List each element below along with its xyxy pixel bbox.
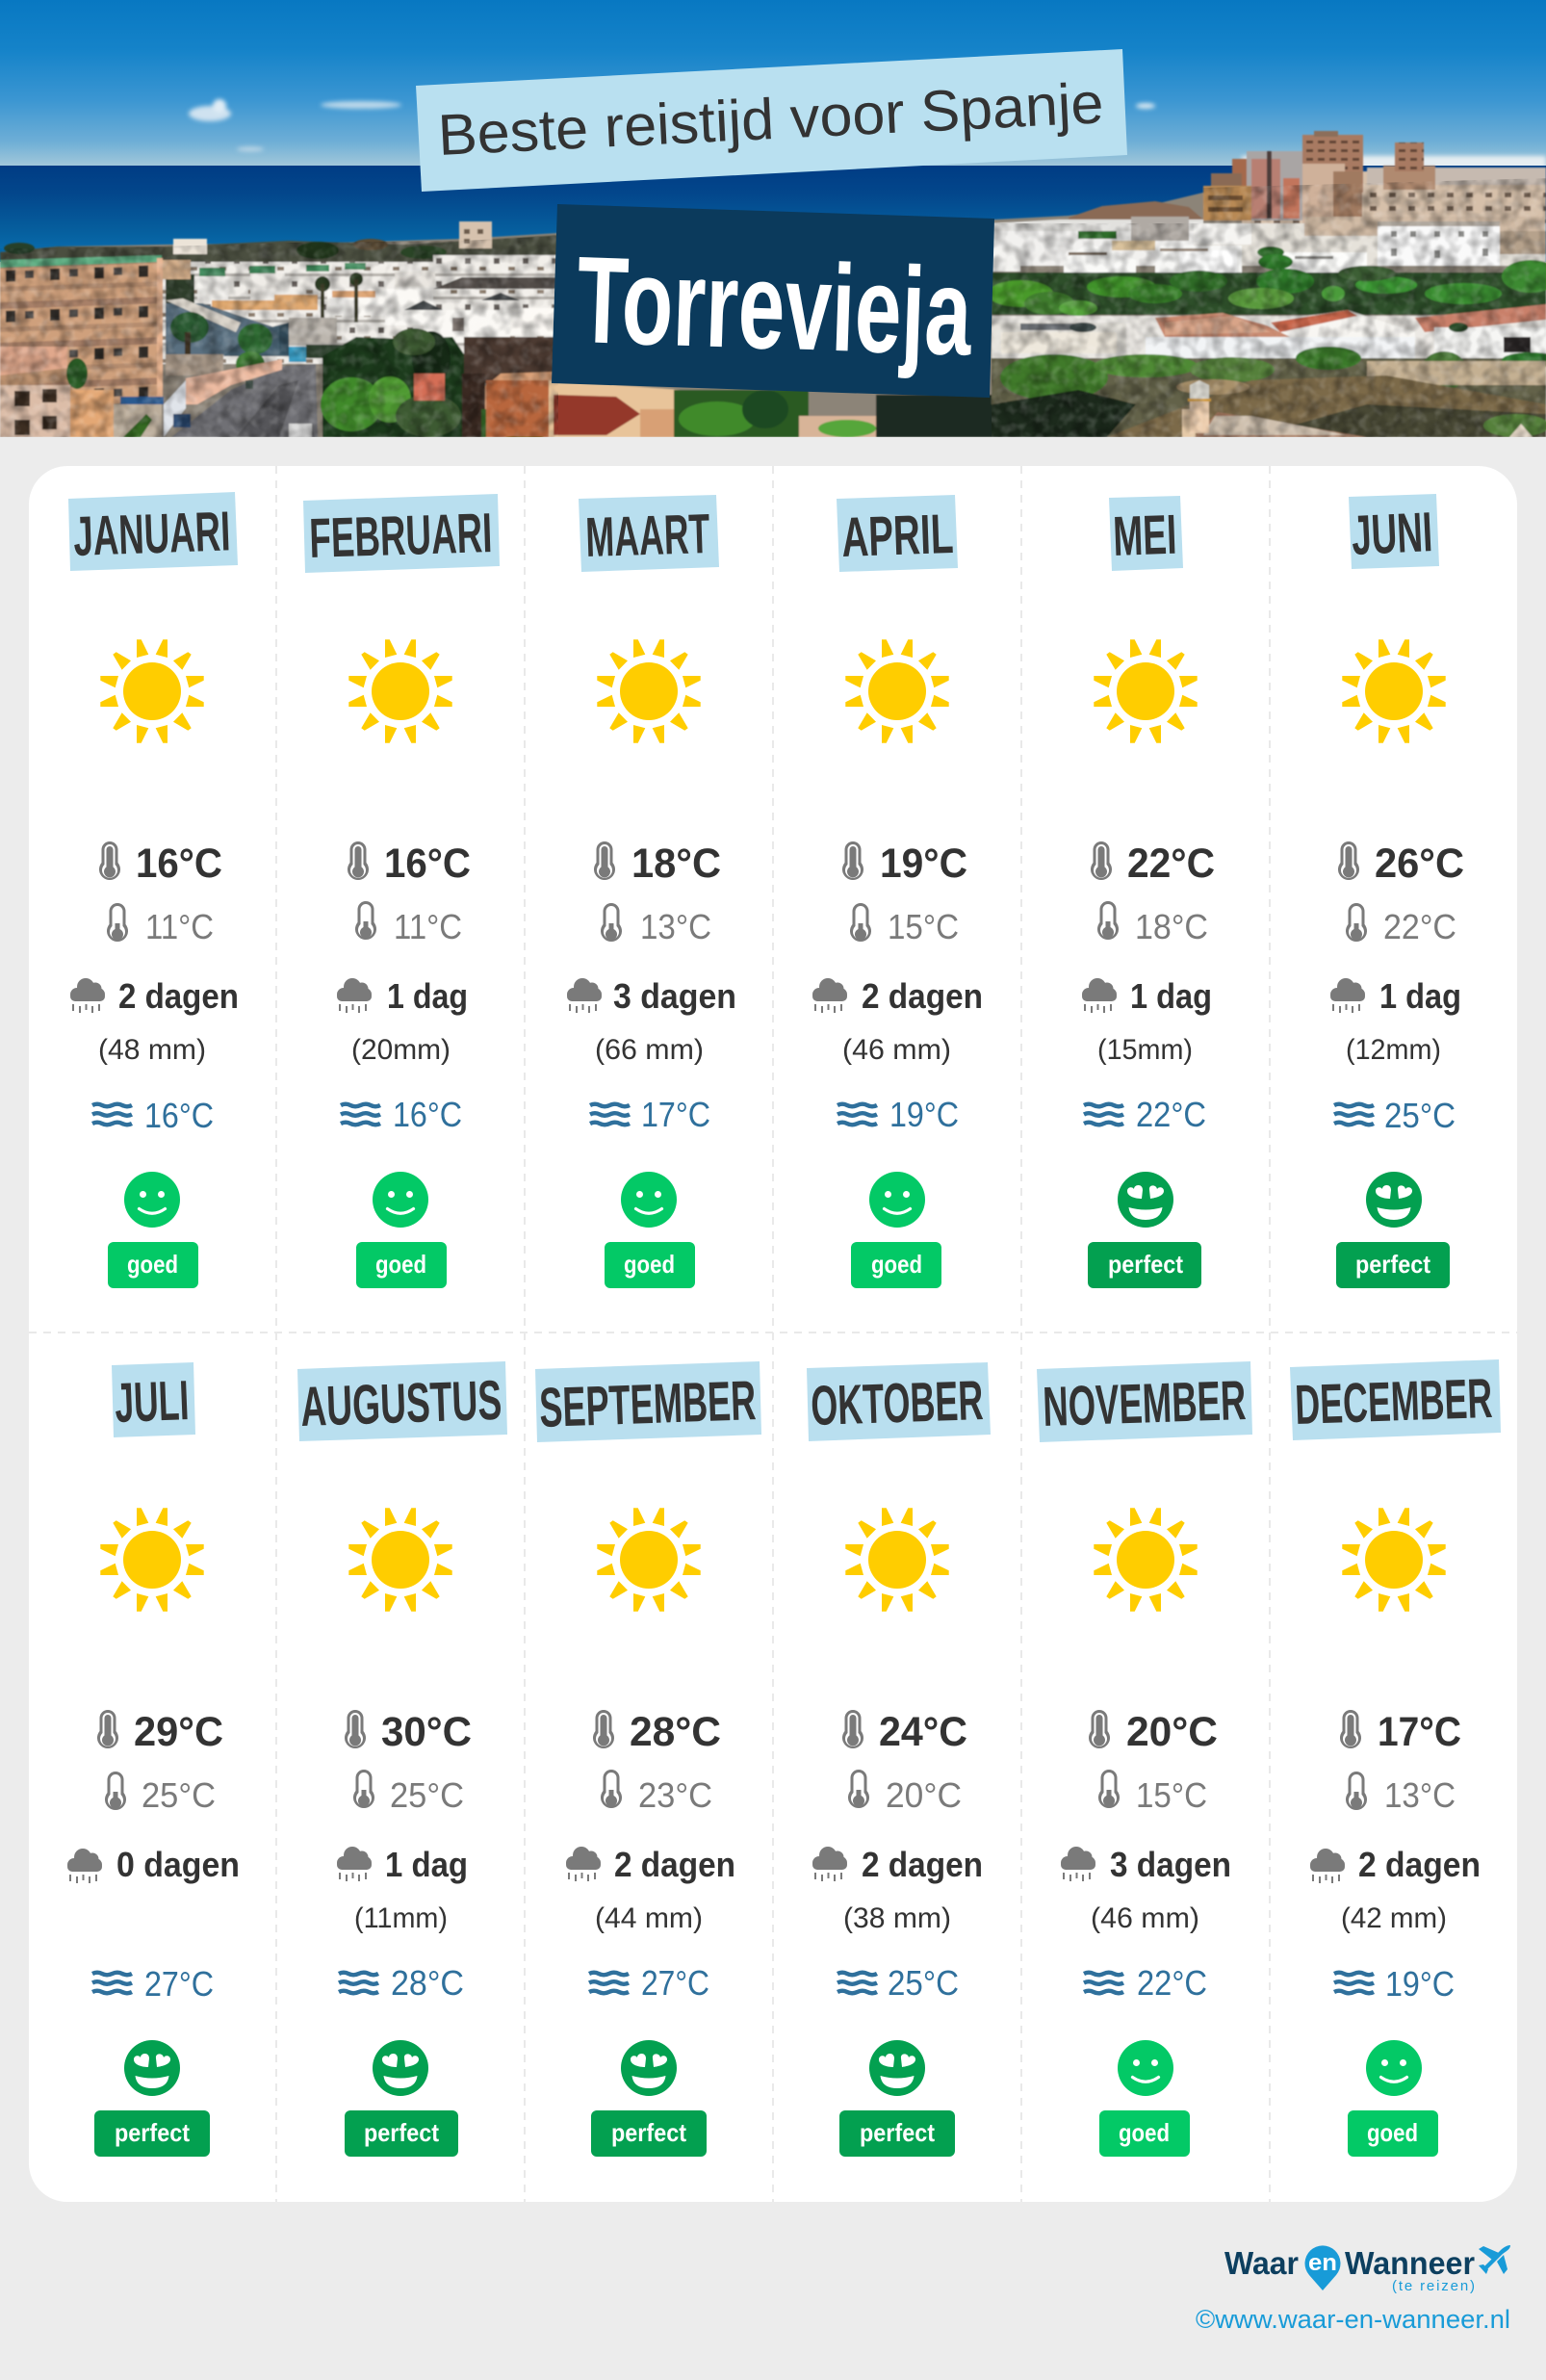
panel: weather calendar card [29,466,1517,2202]
rating badge: goed [375,1250,426,1279]
high temperature [1340,1709,1461,1755]
title banner: Torrevieja: Torrevieja [575,231,974,382]
website credit: ©www.waar-en-wanneer.nl [1196,2305,1510,2334]
rating badge: goed [1119,2118,1170,2147]
icon: smiley [124,2040,180,2096]
icon: smiley [1366,2040,1422,2096]
rain days [1061,1845,1231,1884]
water temperature [589,1963,709,2003]
rain days [566,1845,735,1884]
rating badge: perfect [1355,1250,1430,1279]
low temperature [1097,901,1208,946]
heading [807,1362,991,1441]
icon: smiley [373,2040,428,2096]
heading: SEPTEMBER [538,1369,757,1439]
rating badge: perfect [860,2118,935,2147]
low temperature: 11°C [394,907,462,946]
icon: sun [100,1508,204,1612]
rainfall: (42 mm) [1341,1902,1447,1934]
rating badge [1099,2110,1190,2157]
rating badge [591,2110,707,2157]
low temperature [601,903,711,946]
low temperature: 25°C [142,1775,216,1815]
month: oktober [807,1362,991,2157]
low temperature [1098,1770,1207,1815]
rain days: 0 dagen [116,1845,240,1884]
rating badge [108,1242,198,1288]
low temperature [107,903,214,946]
logo tagline: (te reizen) [1392,2278,1475,2294]
high temperature [1338,841,1464,887]
water temperature [1334,1964,1455,2004]
low temperature: 13°C [1384,1775,1456,1815]
water temperature: 25°C [1384,1096,1456,1135]
logo: Waar en Wanneer: Wanneer [1345,2245,1475,2281]
high temperature: 16°C [136,841,222,887]
icon: sun [597,639,701,743]
month: december [1290,1359,1501,2157]
icon: smiley [124,1172,180,1228]
low temperature: 13°C [640,907,711,946]
water temperature: 16°C [144,1096,214,1135]
heading: FEBRUARI [308,502,493,570]
low temperature: 11°C [145,907,214,946]
icon: smiley [869,1172,925,1228]
rain days: 3 dagen [1110,1845,1231,1884]
water temperature [341,1095,462,1134]
high temperature: 20°C [1126,1709,1218,1755]
rain days [1082,976,1212,1016]
rating badge: perfect [115,2118,190,2147]
logo: Waar en Wanneer: Waar [1224,2245,1299,2281]
rating badge [605,1242,695,1288]
rating badge: goed [127,1250,178,1279]
left white cluster [431,254,556,263]
rating badge [1336,1242,1450,1288]
icon: sun [845,1508,949,1612]
rainfall: (11mm) [354,1902,448,1934]
high temperature [594,841,721,887]
month: mei [1082,496,1215,1288]
high temperature [842,841,967,887]
low temperature: 22°C [1383,907,1456,946]
white band right [1194,221,1546,268]
subtitle banner: Beste reistijd voor Spanje: Beste reistijd voor Spanje [436,70,1105,168]
rating badge: perfect [611,2118,686,2147]
rain days [567,976,736,1016]
rain days [67,1845,240,1884]
heading [579,495,719,572]
rain days [1310,1845,1481,1884]
heading [297,1361,507,1441]
heading: NOVEMBER [1042,1369,1247,1438]
heading [837,495,958,572]
rain days [812,1845,983,1884]
rating badge [1088,1242,1201,1288]
heading: MAART [584,503,710,569]
rating badge [94,2110,210,2157]
high temperature: 18°C [631,841,721,887]
heading: OKTOBER [810,1369,984,1437]
rain days: 2 dagen [862,976,983,1016]
white houses right [992,316,1546,358]
heading: JANUARI [72,500,231,568]
rain days [337,976,468,1016]
rating badge: goed [1367,2118,1418,2147]
low temperature: 20°C [886,1775,962,1815]
rainfall: (48 mm) [98,1034,206,1066]
low temperature [601,1770,712,1815]
rating badge: goed [624,1250,675,1279]
rain days: 2 dagen [862,1845,983,1884]
water temperature [1334,1096,1456,1135]
high temperature: 29°C [134,1709,223,1755]
icon: smiley [1118,2040,1173,2096]
heading [303,494,500,573]
low temperature [848,1770,962,1815]
rain days [337,1845,468,1884]
heading: JUNI [1351,501,1434,567]
month: januari [68,492,239,1288]
heading [1349,494,1439,569]
icon: sun [348,639,452,743]
rain days: 1 dag [1130,976,1212,1016]
water temperature [339,1963,464,2003]
icon: sun [1094,639,1198,743]
water temperature: 19°C [1385,1964,1455,2004]
water temperature: 22°C [1136,1095,1206,1134]
high temperature [842,1709,967,1755]
month: juni [1330,494,1464,1288]
icon: smiley [621,2040,677,2096]
rainfall: (38 mm) [843,1902,951,1934]
water temperature [837,1095,959,1134]
water temperature [92,1964,214,2004]
trees centre-left [322,337,472,437]
water temperature: 27°C [641,1963,709,2003]
water temperature [1084,1963,1207,2003]
water temperature [92,1096,214,1135]
icon: sun [1094,1508,1198,1612]
rating badge: perfect [1108,1250,1183,1279]
icon: airplane [1479,2245,1510,2274]
water temperature [837,1963,959,2003]
water temperature: 16°C [393,1095,462,1134]
heading [535,1361,761,1442]
hotel [0,258,162,406]
water temperature: 22°C [1137,1963,1207,2003]
rain days: 2 dagen [1358,1845,1481,1884]
water temperature: 19°C [889,1095,959,1134]
right background [1241,170,1546,223]
heading [112,1362,195,1437]
month: maart [567,495,736,1288]
low temperature [850,903,959,946]
low temperature: 23°C [638,1775,712,1815]
icon: smiley [1118,1172,1173,1228]
water temperature: 28°C [391,1963,464,2003]
month: september [535,1361,761,2157]
icon: smiley [373,1172,428,1228]
subtitle banner: Beste reistijd voor Spanje [416,49,1127,192]
month: november [1037,1361,1252,2157]
high temperature: 22°C [1127,841,1215,887]
low temperature [105,1772,216,1815]
road [171,364,318,437]
heading: AUGUSTUS [299,1369,502,1438]
heading: APRIL [840,503,954,569]
icon: sun [348,1508,452,1612]
month: februari [303,494,500,1288]
water temperature: 27°C [144,1964,214,2004]
rainfall: (66 mm) [595,1034,704,1066]
rain days: 1 dag [385,1845,468,1884]
rainfall: (20mm) [351,1034,451,1066]
rainfall: (12mm) [1346,1034,1441,1066]
rainfall: (46 mm) [842,1034,951,1066]
icon: smiley [869,2040,925,2096]
rating badge [356,1242,447,1288]
rain days [812,976,983,1016]
houses bottom [464,337,558,383]
high temperature [1091,841,1215,887]
rain days [70,976,239,1016]
rain days: 2 dagen [118,976,239,1016]
rain days: 3 dagen [613,976,736,1016]
hillside [992,358,1546,437]
left village [162,260,554,365]
icon: sun [1342,639,1446,743]
high temperature: 24°C [879,1709,967,1755]
heading: JULI [114,1369,190,1435]
low temperature [353,1770,464,1815]
towers [1302,135,1363,193]
low temperature: 15°C [1136,1775,1207,1815]
rainfall: (44 mm) [595,1902,703,1934]
low temperature: 18°C [1135,907,1208,946]
below dark title [486,380,554,437]
water temperature: 25°C [888,1963,959,2003]
rating badge [345,2110,458,2157]
heading [68,492,238,571]
green band right [992,272,1546,315]
high temperature: 30°C [381,1709,472,1755]
high temperature: 17°C [1378,1709,1461,1755]
icon: sun [100,639,204,743]
water temperature [1084,1095,1206,1134]
high temperature: 19°C [880,841,967,887]
water temperature [590,1095,710,1134]
low temperature [1346,903,1456,946]
high temperature [348,841,471,887]
rainfall: (46 mm) [1091,1902,1199,1934]
low temperature: 15°C [888,907,959,946]
icon: sun [597,1508,701,1612]
heading [1037,1361,1252,1442]
icon: sun [845,639,949,743]
low temperature [1346,1772,1456,1815]
high temperature: 26°C [1375,841,1464,887]
rating badge [1348,2110,1438,2157]
high temperature [97,1709,223,1755]
high temperature [99,841,222,887]
water temperature: 17°C [641,1095,710,1134]
logo: Waar en Wanneer [1224,2245,1510,2294]
rating badge: perfect [364,2118,439,2147]
heading [1109,496,1183,571]
rain days [1330,976,1461,1016]
rainfall: (15mm) [1097,1034,1193,1066]
rating badge [839,2110,955,2157]
rain days: 1 dag [387,976,468,1016]
title banner: Torrevieja [552,204,994,398]
heading: MEI [1112,504,1177,568]
low temperature [355,901,462,946]
rain days: 2 dagen [614,1845,735,1884]
rating badge: goed [871,1250,922,1279]
icon: smiley [1366,1172,1422,1228]
high temperature: 16°C [384,841,471,887]
month: juli [67,1362,240,2157]
icon: sun [1342,1508,1446,1612]
high temperature: 28°C [630,1709,721,1755]
low left house [0,368,67,385]
header photo: Torrevieja coastline [0,0,1546,441]
month: april [812,495,983,1288]
icon: map pin [1305,2245,1340,2290]
icon: map pin: en [1308,2250,1337,2276]
icon: smiley [621,1172,677,1228]
month: augustus [297,1361,507,2157]
low temperature: 25°C [390,1775,464,1815]
rain days: 1 dag [1379,976,1461,1016]
rating badge [851,1242,941,1288]
